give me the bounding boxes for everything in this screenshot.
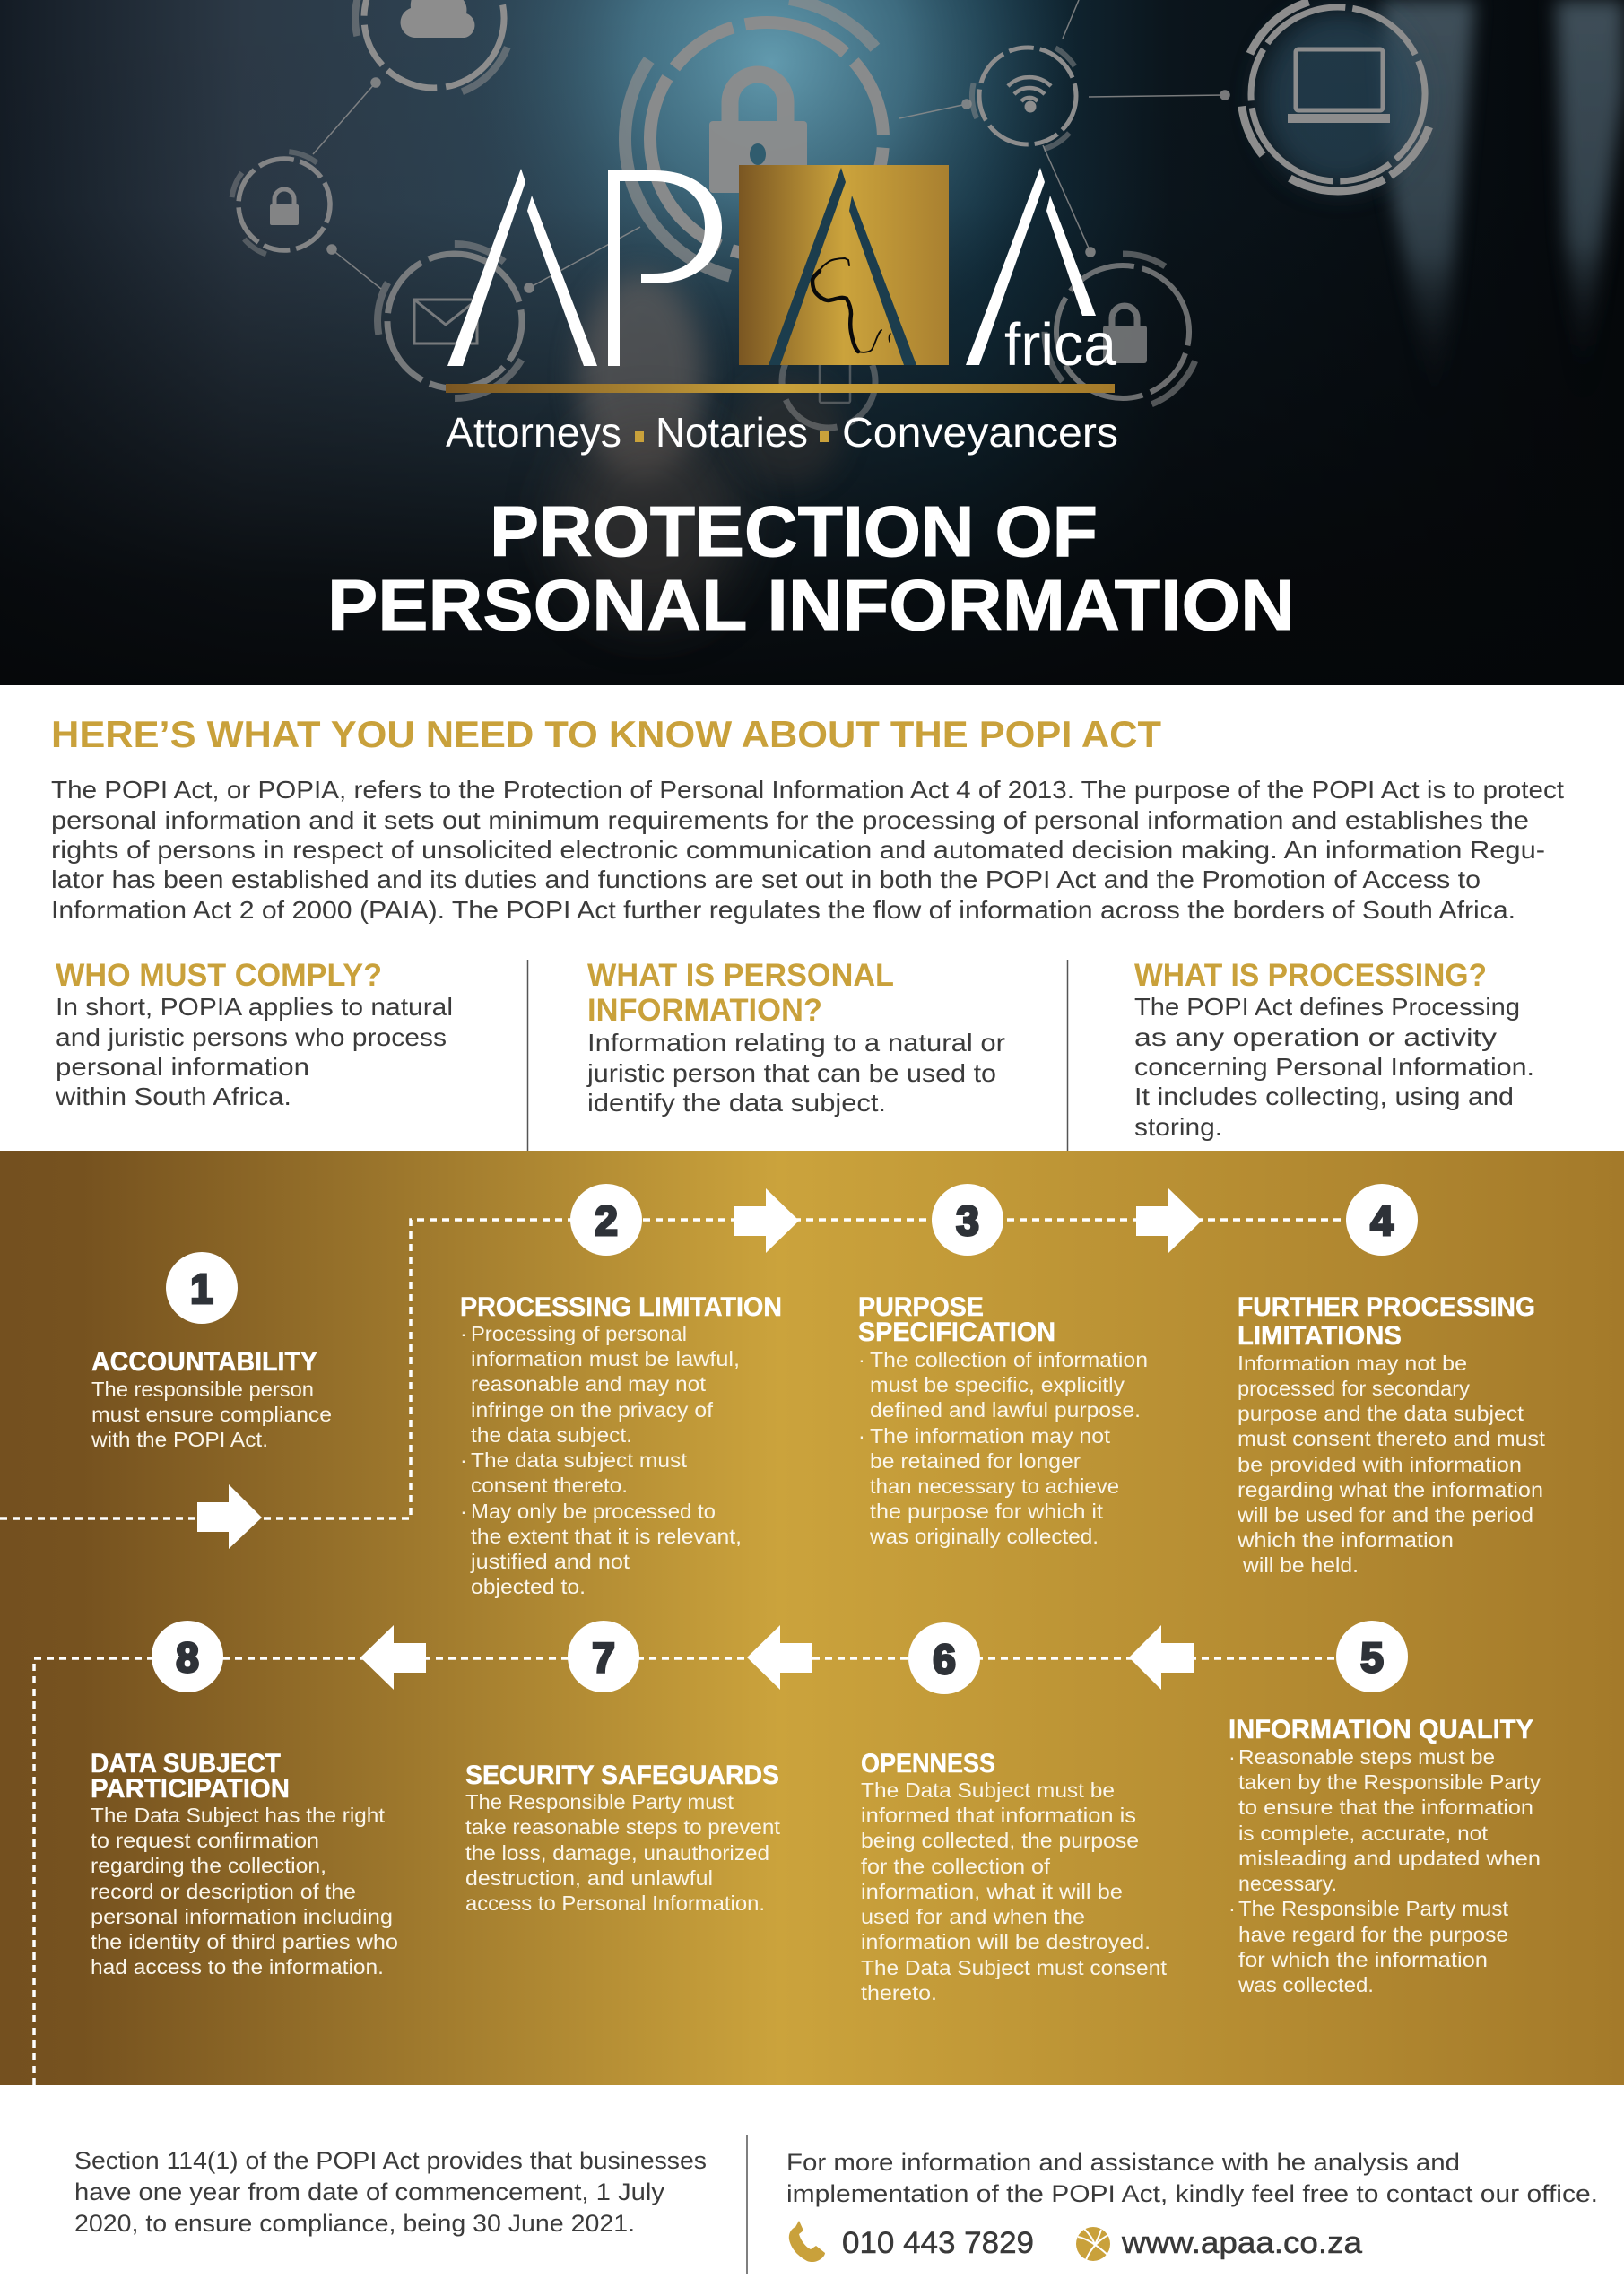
website: www.apaa.co.za [1121,2226,1362,2260]
panel: what is processing: storing. [1134,1113,1222,1141]
step 3: purpose specification: · [858,1348,865,1371]
step 3: purpose specification: · [858,1424,865,1448]
step 5: information quality: The Responsible Party must [1238,1897,1508,1920]
step 8: data subject participation: record or description of the [91,1880,356,1903]
panel: what is processing: The POPI Act defines Processing [1134,993,1520,1021]
dashed flow line top [0,1220,1382,1518]
step 5: information quality: have regard for the purpose [1238,1923,1508,1946]
step 2: processing limitation: · [460,1322,467,1345]
step 5: information quality: misleading and updated when [1238,1847,1541,1870]
step 8: data subject participation [91,1621,398,1979]
step 3: purpose specification: PURPOSE [858,1292,984,1322]
step 8: data subject participation: had access to the information. [91,1955,384,1979]
panel: who must comply: and juristic persons who process [56,1023,447,1051]
icon: right padlock [1042,251,1198,407]
step 5: information quality: INFORMATION QUALITY [1229,1715,1533,1744]
step 8: data subject participation: the identity of third parties who [91,1930,398,1953]
intro paragraph: rights of persons in respect of unsolicited electronic communication and automated decision making. An information Regu- [51,836,1545,864]
step 2: processing limitation: · [460,1500,467,1523]
intro paragraph: Information Act 2 of 2000 (PAIA). The POPI Act further regulates the flow of information across the borders of South Africa. [51,896,1515,924]
step 4: further processing limitations: purpose and the data subject [1238,1402,1524,1425]
panel: what is personal information: juristic person that can be used to [586,1059,996,1087]
footer: section 114 note: have one year from date of commencement, 1 July [74,2179,665,2205]
step 3: purpose specification: The collection of information [870,1348,1148,1371]
step 6: openness: 6 [933,1636,956,1683]
step 5: information quality: · [1229,1897,1236,1920]
step 2: processing limitation: reasonable and may not [471,1372,706,1396]
step 4: further processing limitations: be provided with information [1238,1453,1522,1476]
step 7: security safeguards [465,1621,780,1915]
footer: section 114 note [74,2147,707,2237]
panel: what is processing: as any operation or activity [1134,1023,1497,1051]
icon: laptop [1238,0,1433,196]
step 5: information quality [1229,1621,1541,1996]
panel: what is processing: It includes collecting, using and [1134,1083,1514,1110]
step 8: data subject participation: personal information including [91,1905,393,1928]
footer: contact note [786,2149,1598,2207]
logo letter P [608,170,722,366]
step 4: further processing limitations: LIMITATIONS [1238,1321,1402,1351]
step 3: purpose specification: was originally collected. [869,1525,1099,1548]
panel: what is personal information: INFORMATION? [587,993,822,1028]
intro paragraph: personal information and it sets out minimum requirements for the processing of personal information and establishes the [51,806,1529,834]
step 1: accountability: ACCOUNTABILITY [91,1347,317,1377]
tagline: Notaries [656,409,808,456]
step 6: openness: The Data Subject must consent [861,1956,1167,1979]
heading: here's what you need to know: HERE’S WHAT YOU NEED TO KNOW ABOUT THE POPI ACT [51,713,1161,755]
step 2: processing limitation: the data subject. [471,1423,632,1447]
logo text frica: frica [1004,311,1117,378]
arrow 6 [360,1625,426,1690]
step 8: data subject participation: The Data Subject has the right [91,1804,385,1827]
step 2: processing limitation: May only be processed to [471,1500,716,1523]
footer: section 114 note: 2020, to ensure compliance, being 30 June 2021. [74,2210,635,2237]
step 4: further processing limitations: regarding what the information [1238,1478,1543,1501]
intro paragraph: lator has been established and its duties and functions are set out in both the POPI Act and the Promotion of Access to [51,865,1481,893]
step 6: openness: information will be destroyed. [861,1930,1151,1953]
step 8: data subject participation: regarding the collection, [91,1854,326,1877]
step 1: accountability: 1 [190,1265,213,1312]
step 2: processing limitation: 2 [595,1197,618,1244]
step 4: further processing limitations: Information may not be [1238,1352,1467,1375]
step 6: openness: The Data Subject must be [861,1779,1115,1802]
step 5: information quality: is complete, accurate, not [1238,1822,1488,1845]
tagline: Conveyancers [842,409,1118,456]
step 4: further processing limitations: will be held. [1242,1553,1359,1577]
panel: who must comply: within South Africa. [55,1083,291,1110]
step 6: openness: OPENNESS [861,1749,995,1779]
step 5: information quality: for which the information [1238,1948,1488,1971]
arrow 5 [747,1625,812,1690]
step 2: processing limitation: The data subject must [471,1448,687,1472]
step 8: data subject participation: 8 [176,1634,199,1681]
arrow 3 [1136,1188,1202,1253]
step 3: purpose specification: SPECIFICATION [858,1318,1055,1347]
dashed flow line bottom [34,1658,1372,2085]
step 4: further processing limitations: must consent thereto and must [1238,1427,1545,1450]
step 6: openness [861,1622,1167,2005]
panel: what is personal information: identify the data subject. [587,1089,886,1117]
panel: who must comply: personal information [56,1053,309,1081]
icon: globe [1076,2227,1110,2261]
arrow 2 [734,1188,799,1253]
step 6: openness: for the collection of [861,1855,1051,1878]
logo gold square [739,165,949,365]
footer: contact note: implementation of the POPI Act, kindly feel free to contact our office. [786,2180,1598,2207]
panel: what is personal information: WHAT IS PERSONAL [587,958,894,993]
logo gold bar [446,384,1115,393]
step 7: security safeguards: SECURITY SAFEGUARDS [465,1761,779,1790]
icon: small padlock [230,149,333,257]
tagline [446,409,1118,456]
step 3: purpose specification: than necessary to achieve [870,1474,1119,1498]
icon: wifi [969,45,1078,152]
panel: eight conditions gold band [0,1151,1624,2085]
step 5: information quality: 5 [1360,1634,1384,1681]
logo letter A right [966,168,1096,365]
step 5: information quality: Reasonable steps must be [1238,1745,1495,1769]
step 5: information quality: taken by the Responsible Party [1238,1770,1541,1794]
step 1: accountability: with the POPI Act. [91,1428,268,1451]
panel: what is personal information [586,958,1005,1117]
step 1: accountability: must ensure compliance [91,1403,332,1426]
step 3: purpose specification: be retained for longer [870,1449,1081,1473]
icon: phone [778,365,879,430]
hero banner [0,0,1624,685]
step 8: data subject participation: PARTICIPATION [91,1774,290,1804]
icon: large padlock [619,0,890,282]
step 7: security safeguards: 7 [592,1634,615,1681]
step 2: processing limitation: justified and not [470,1550,630,1573]
panel: what is processing: concerning Personal Information. [1134,1053,1534,1081]
panel: what is personal information: Information relating to a natural or [587,1029,1005,1057]
step 3: purpose specification: must be specific, explicitly [870,1373,1125,1396]
step 2: processing limitation: objected to. [471,1575,586,1598]
step 3: purpose specification: the purpose for which it [870,1500,1103,1523]
step 3: purpose specification [858,1184,1148,1548]
icon: envelope [374,240,525,402]
title: PROTECTION OF [490,491,1098,571]
step 4: further processing limitations: 4 [1370,1197,1394,1244]
step 6: openness: informed that information is [861,1804,1136,1827]
step 2: processing limitation: information must be lawful, [471,1347,740,1370]
step 6: openness: used for and when the [861,1905,1085,1928]
step 2: processing limitation: · [460,1448,467,1472]
arrow 4 [1129,1625,1194,1690]
step 6: openness: information, what it will be [861,1880,1123,1903]
step 5: information quality: · [1229,1745,1236,1769]
title: PERSONAL INFORMATION [327,565,1295,645]
step 6: openness: thereto. [861,1981,937,2005]
title [327,491,1295,645]
step 2: processing limitation: PROCESSING LIMITATION [460,1292,782,1322]
step 2: processing limitation: consent thereto. [471,1474,628,1497]
step 4: further processing limitations: processed for secondary [1238,1377,1470,1400]
logo letter A on gold [769,168,916,365]
footer: section 114 note: Section 114(1) of the POPI Act provides that businesses [74,2147,707,2174]
step 2: processing limitation [460,1184,782,1598]
step 7: security safeguards: take reasonable steps to prevent [465,1815,780,1839]
step 4: further processing limitations [1237,1184,1545,1577]
step 1: accountability: The responsible person [91,1378,314,1401]
step 6: openness: being collected, the purpose [861,1829,1139,1852]
arrow 1 [197,1484,262,1549]
step 3: purpose specification: The information may not [870,1424,1110,1448]
step 7: security safeguards: the loss, damage, unauthorized [465,1841,769,1865]
step 2: processing limitation: Processing of personal [471,1322,687,1345]
step 5: information quality: to ensure that the information [1238,1796,1533,1819]
step 2: processing limitation: the extent that it is relevant, [471,1525,742,1548]
step 7: security safeguards: destruction, and unlawful [465,1866,713,1890]
icon: cloud [352,0,511,95]
step 8: data subject participation: to request confirmation [91,1829,319,1852]
icon: phone [789,2221,825,2262]
phone number: 010 443 7829 [842,2226,1034,2260]
intro paragraph: The POPI Act, or POPIA, refers to the Protection of Personal Information Act 4 of 2013. The purpose of the POPI Act is to protect [51,776,1564,804]
tagline: Attorneys [446,409,621,456]
step 4: further processing limitations: will be used for and the period [1237,1503,1533,1526]
step 7: security safeguards: access to Personal Information. [465,1892,765,1915]
connector lines between security icons [313,0,1229,292]
icon: Africa outline [812,258,890,352]
step 7: security safeguards: The Responsible Party must [465,1790,734,1813]
step 1: accountability [91,1252,332,1451]
panel: what is processing [1134,958,1534,1141]
panel: who must comply [55,958,453,1110]
step 8: data subject participation: DATA SUBJECT [91,1749,281,1779]
intro paragraph [51,776,1564,924]
panel: who must comply: WHO MUST COMPLY? [56,958,382,993]
step 2: processing limitation: infringe on the privacy of [471,1398,713,1422]
step 3: purpose specification: 3 [956,1197,979,1244]
logo letter A [447,169,597,366]
step 5: information quality: necessary. [1238,1872,1337,1895]
panel: who must comply: In short, POPIA applies to natural [56,993,453,1021]
step 3: purpose specification: defined and lawful purpose. [870,1398,1141,1422]
logo: APAA Africa [446,165,1118,456]
step 5: information quality: was collected. [1238,1973,1374,1996]
step 4: further processing limitations: FURTHER PROCESSING [1238,1292,1535,1322]
panel: what is processing: WHAT IS PROCESSING? [1134,958,1487,993]
footer: contact note: For more information and assistance with he analysis and [786,2149,1460,2176]
step 4: further processing limitations: which the information [1237,1528,1454,1552]
